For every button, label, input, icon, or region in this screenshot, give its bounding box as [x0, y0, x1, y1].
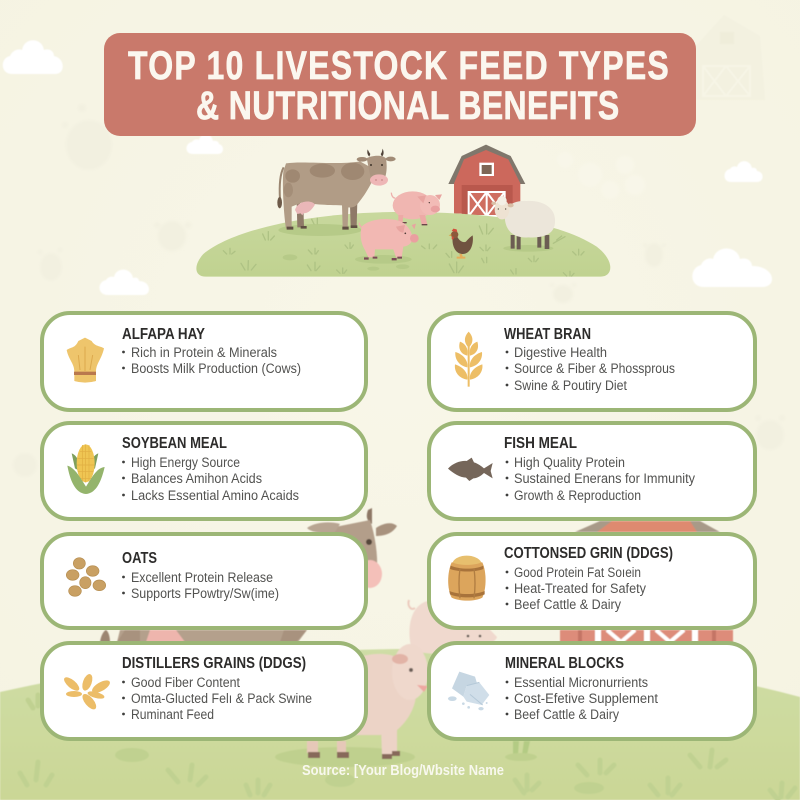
ground tufts and patches	[20, 695, 795, 800]
text: cottonseed grain: COTTONSED GRIN (DDGS)	[504, 545, 673, 562]
text: cottonseed grain: Good Protein Fat Soıein	[514, 565, 641, 580]
icon: fish	[448, 458, 493, 481]
panel: wheat bran	[429, 313, 755, 410]
title banner	[104, 33, 696, 136]
source line: Source: [Your Blog/Wbsite Name	[302, 762, 504, 779]
text: soybean meal: SOYBEAN MEAL	[122, 435, 227, 452]
text: distillers grains	[122, 655, 312, 722]
icon: hay bundle	[67, 338, 104, 383]
text: wheat bran	[504, 326, 675, 393]
banner panel	[104, 33, 696, 136]
text: soybean meal	[122, 435, 299, 503]
text: oats	[122, 550, 279, 601]
text: distillers grains: Good Fiber Content	[131, 675, 240, 690]
text: mineral blocks	[505, 655, 658, 722]
text: distillers grains: Ruminant Feed	[131, 707, 214, 722]
icon: oat grains	[66, 558, 106, 596]
large cow	[100, 508, 397, 642]
icon: mineral blocks	[448, 672, 489, 710]
text: wheat bran: Swine & Poutiry Diet	[514, 378, 627, 393]
large hill	[0, 649, 800, 800]
large barn	[505, 521, 733, 761]
text: cottonseed grain	[504, 545, 673, 612]
text: oats: OATS	[122, 550, 157, 567]
shadows and grass	[223, 218, 584, 276]
clouds	[3, 40, 772, 295]
text: oats: Excellent Protein Release	[131, 570, 273, 585]
text: oats: Supports FPowtry/Sw(ime)	[131, 586, 279, 601]
panel: cottonseed grain	[429, 534, 755, 628]
cow	[277, 149, 396, 230]
text: alfalfa hay: ALFAPA HAY	[122, 326, 205, 343]
title text: TOP 10 LIVESTOCK FEED TYPES	[128, 43, 669, 88]
text: cottonseed grain: Heat-Treated for Safety	[514, 581, 646, 596]
text: alfalfa hay: Boosts Milk Production (Cows)	[131, 361, 301, 376]
background scene behind the cards	[0, 508, 800, 800]
text: cottonseed grain: Beef Cattle & Dairy	[514, 597, 621, 612]
title text	[128, 43, 669, 128]
chicken	[449, 229, 473, 259]
text: fish meal	[504, 435, 695, 503]
faint sparkle blotch	[557, 152, 645, 199]
barn	[448, 145, 525, 216]
text: mineral blocks: Cost-Efetive Supplement	[514, 691, 658, 706]
large pale pig	[408, 600, 497, 654]
text: fish meal: High Quality Protein	[514, 455, 625, 470]
text: mineral blocks: MINERAL BLOCKS	[505, 655, 624, 672]
panel: fish meal	[429, 423, 755, 519]
green hill	[196, 212, 610, 277]
panel: oats	[42, 534, 366, 628]
text: soybean meal: Balances Amihon Acids	[131, 471, 262, 486]
icon: grain kernels	[62, 673, 112, 712]
hero farm scene	[196, 145, 610, 277]
text: distillers grains: Omta-Glucted Felı & Pack Swine	[131, 691, 312, 706]
text: mineral blocks: Essential Micronurrients	[514, 675, 648, 690]
faint paw prints	[13, 104, 785, 477]
text: wheat bran: Digestive Health	[514, 345, 607, 360]
text: fish meal: Sustained Enerans for Immunity	[514, 471, 695, 486]
icon: barrel	[448, 556, 486, 601]
text: wheat bran: Source & Fiber & Phossprous	[514, 361, 675, 376]
text: fish meal: FISH MEAL	[504, 435, 577, 452]
panel: mineral blocks	[429, 643, 755, 739]
panel: alfalfa hay	[42, 313, 366, 410]
icon: corn	[67, 444, 105, 494]
text: fish meal: Growth & Reproduction	[514, 488, 641, 503]
text: alfalfa hay: Rich in Protein & Minerals	[131, 345, 277, 360]
faint barn, top right	[694, 15, 765, 100]
text: soybean meal: High Energy Source	[131, 455, 240, 470]
text: mineral blocks: Beef Cattle & Dairy	[514, 707, 619, 722]
back pig	[391, 191, 442, 225]
icon: wheat	[455, 332, 482, 387]
text: soybean meal: Lacks Essential Amino Acaids	[131, 488, 299, 503]
panel: distillers grains	[42, 643, 366, 739]
front pig	[359, 219, 419, 260]
panel: soybean meal	[42, 423, 366, 519]
text: distillers grains: DISTILLERS GRAINS (DDGS)	[122, 655, 306, 672]
title text: & NUTRITIONAL BENEFITS	[196, 83, 619, 128]
text: wheat bran: WHEAT BRAN	[504, 326, 591, 343]
large pale sheep	[275, 644, 428, 767]
sheep	[491, 196, 555, 249]
text: alfalfa hay	[122, 326, 301, 376]
